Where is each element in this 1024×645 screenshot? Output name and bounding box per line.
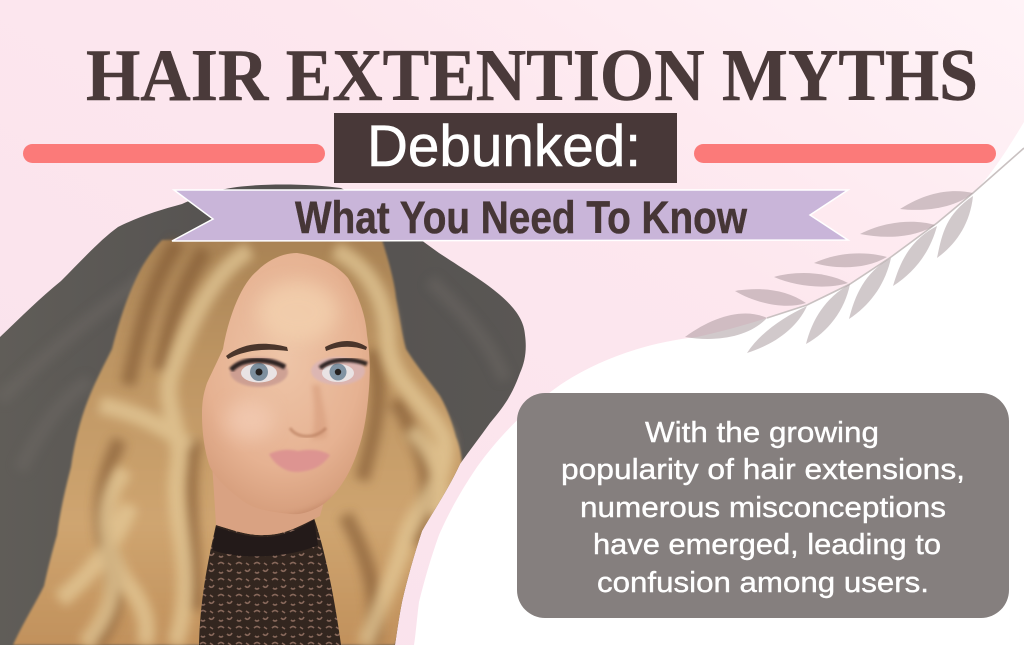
dark hair shading bbox=[95, 242, 428, 645]
portrait photo bbox=[0, 180, 530, 645]
ribbon banner: What You Need To Know bbox=[295, 192, 748, 243]
neck bbox=[212, 472, 323, 536]
intro text panel: have emerged, leading to bbox=[593, 529, 941, 561]
left eye bbox=[230, 357, 288, 387]
cheek glow bbox=[226, 400, 274, 440]
intro text panel: numerous misconceptions bbox=[580, 492, 946, 524]
photo backdrop bbox=[0, 180, 530, 645]
black lace top bbox=[199, 518, 341, 645]
chin shadow bbox=[293, 500, 328, 514]
right accent bar bbox=[694, 144, 996, 163]
face bbox=[202, 253, 370, 514]
lips bbox=[269, 450, 330, 472]
nose side shadow bbox=[312, 385, 327, 440]
collar band bbox=[212, 520, 318, 556]
white swoop bbox=[414, 122, 1024, 645]
intro text panel: confusion among users. bbox=[597, 567, 929, 599]
nose bbox=[290, 428, 326, 436]
hair mass bbox=[13, 240, 462, 645]
intro text panel: popularity of hair extensions, bbox=[561, 454, 965, 486]
intro text panel: With the growing bbox=[645, 417, 879, 449]
blond hair waves bbox=[60, 250, 446, 645]
right eye bbox=[311, 357, 367, 385]
branch with leaves bbox=[685, 148, 1024, 353]
left accent bar bbox=[23, 144, 325, 163]
right eyebrow bbox=[325, 341, 367, 351]
intro text panel bbox=[517, 393, 1009, 618]
title: HAIR EXTENTION MYTHS bbox=[86, 35, 978, 117]
forehead glow bbox=[258, 282, 338, 342]
subtitle box: Debunked: bbox=[367, 114, 641, 179]
left eyebrow bbox=[226, 344, 288, 359]
